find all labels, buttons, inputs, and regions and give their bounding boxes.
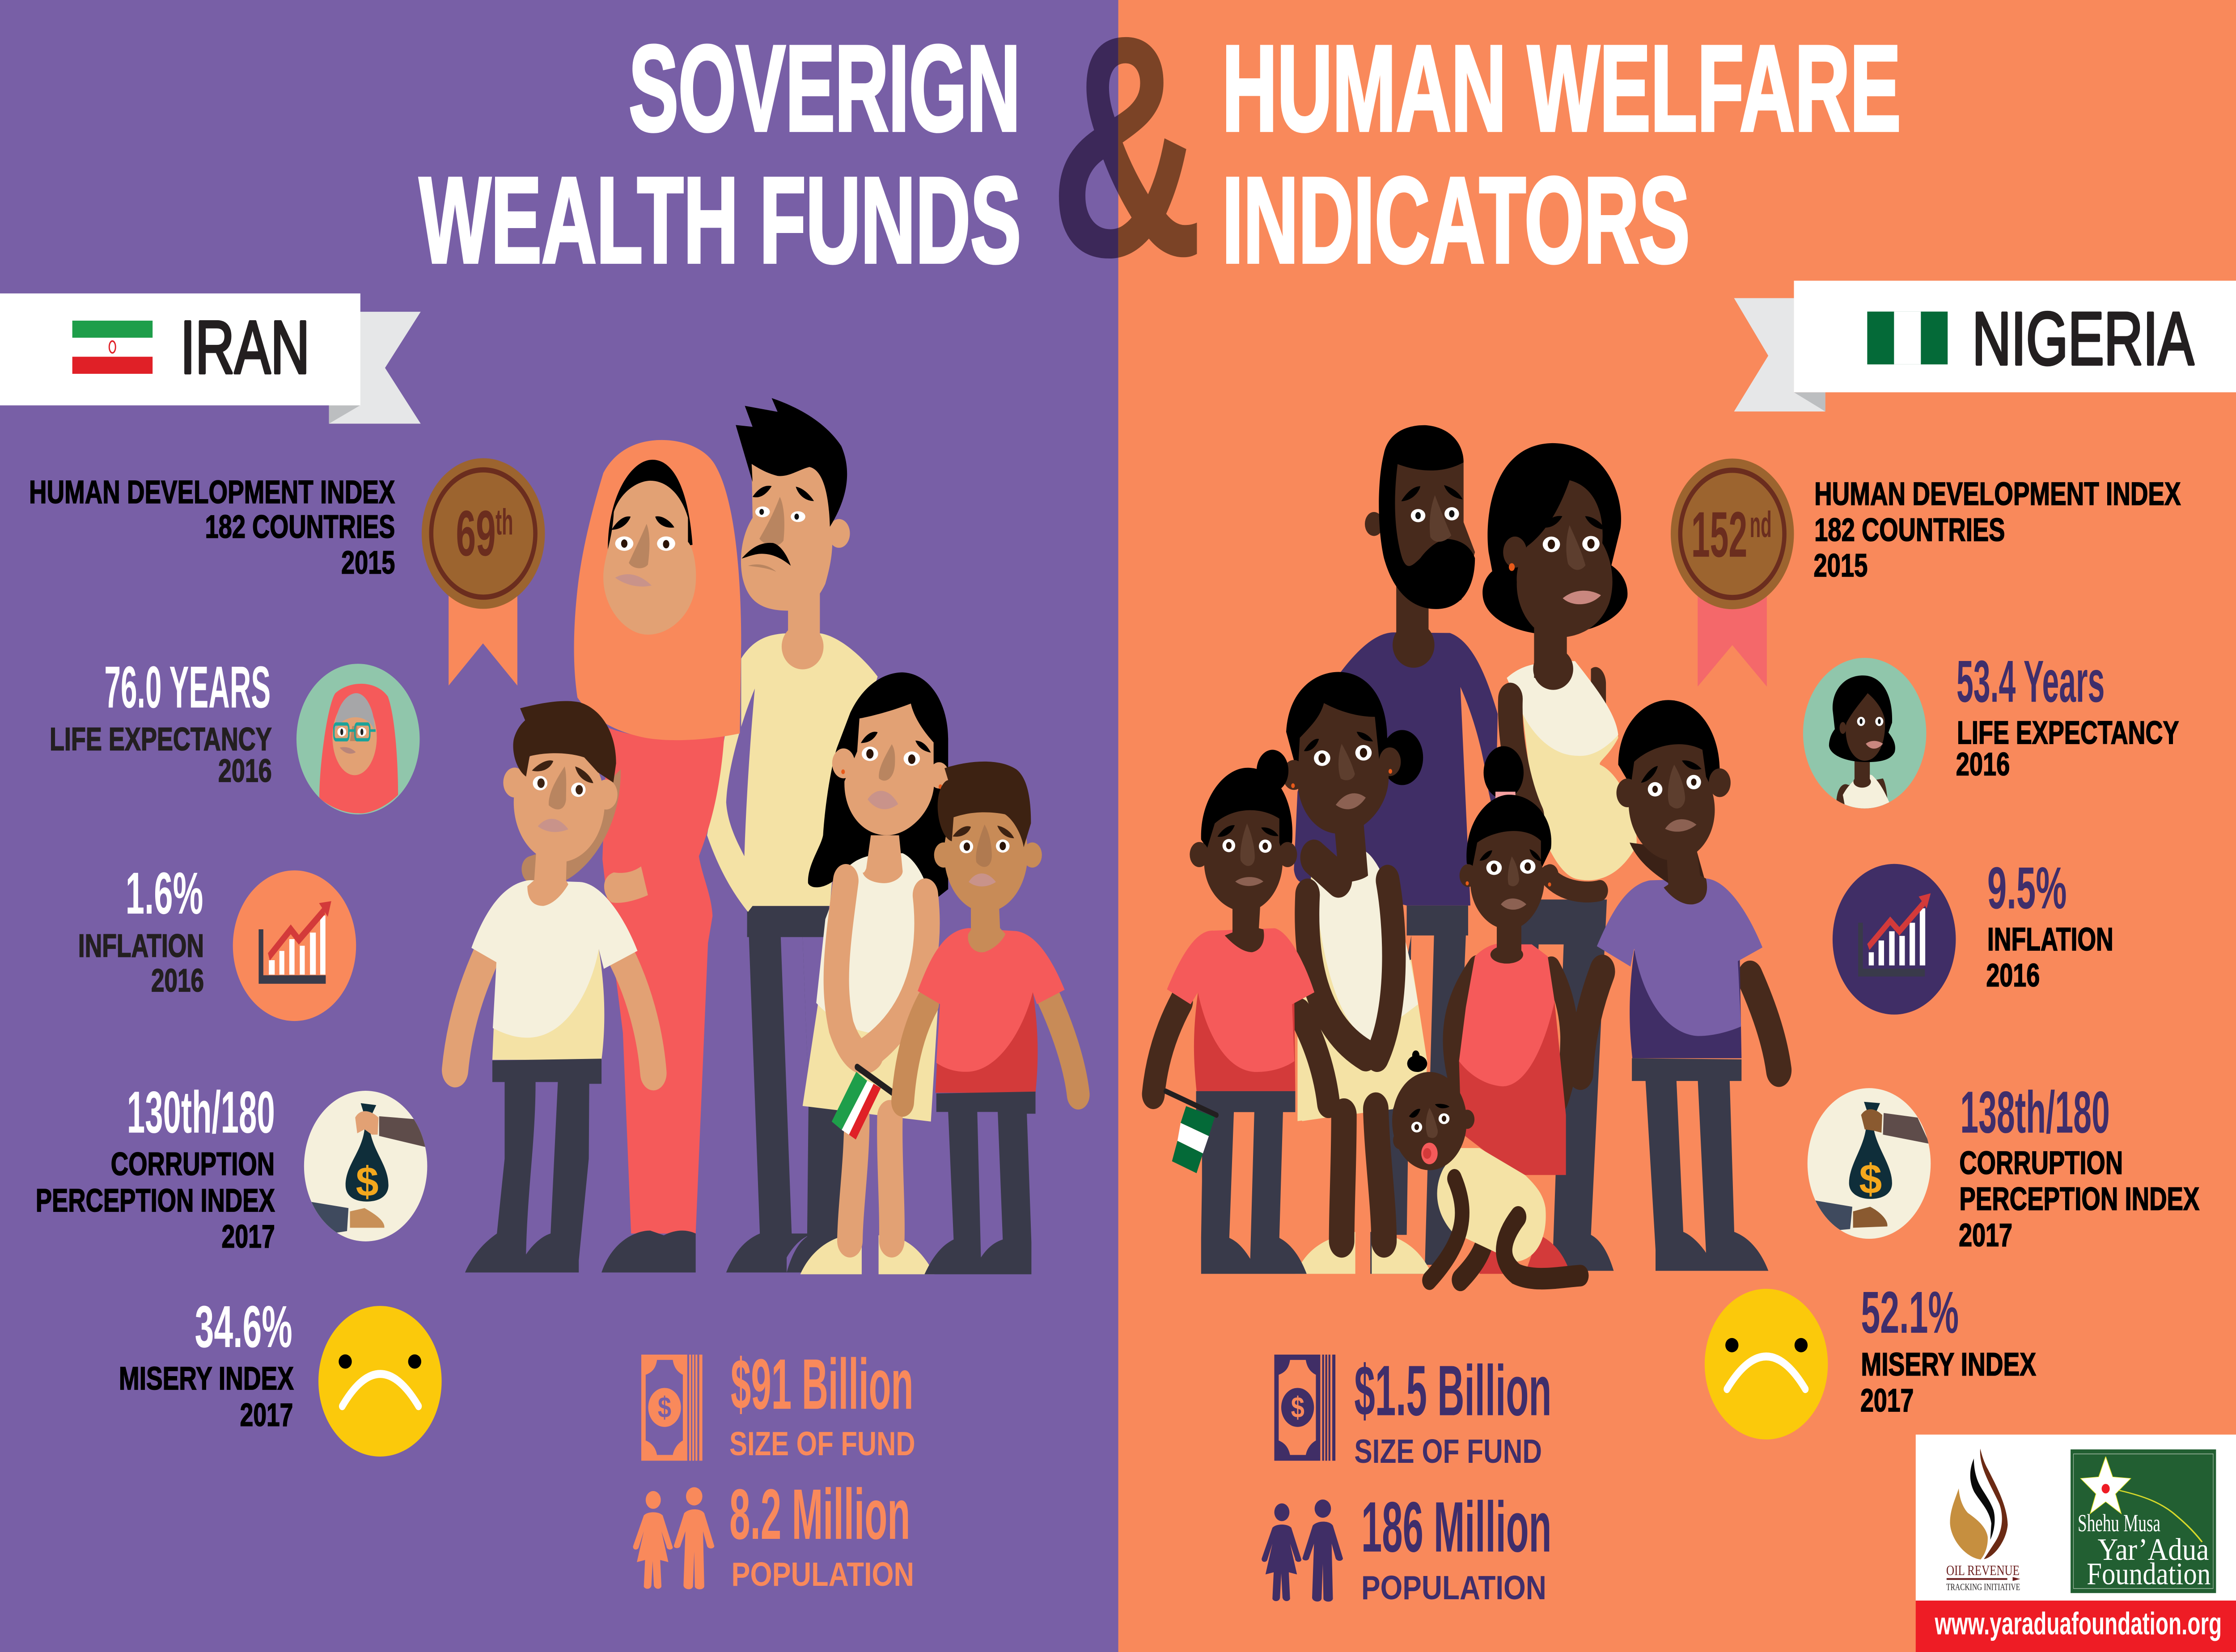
icon: bribe money bag Nigeria bbox=[1808, 1088, 1931, 1239]
text: inflation Iran: 1.6% bbox=[126, 860, 203, 926]
text: HDI Iran: 2015 bbox=[341, 545, 395, 581]
logo: Yar'Adua Foundation: Yar’Adua bbox=[2098, 1532, 2209, 1567]
text: fund size Iran: SIZE OF FUND bbox=[729, 1425, 915, 1463]
medal: 69th bbox=[422, 458, 545, 686]
figure: father bbox=[707, 398, 878, 1272]
icon: Iran flag held by girl bbox=[832, 1067, 902, 1139]
icon: inflation chart Iran bbox=[233, 870, 356, 1021]
icon: bribe money bag Nigeria: $ bbox=[1859, 1156, 1882, 1203]
text: life expectancy Iran: 76.0 YEARS bbox=[104, 654, 271, 720]
figure: crawling baby bbox=[1392, 1051, 1580, 1280]
text: inflation Nigeria bbox=[1986, 855, 2113, 994]
figure: boy in red shirt bbox=[902, 762, 1078, 1274]
text: HDI Iran bbox=[29, 474, 395, 581]
medal: 69th: th bbox=[495, 501, 513, 542]
title: left part bbox=[419, 20, 1021, 288]
text: inflation Nigeria: 9.5% bbox=[1987, 855, 2067, 921]
icon: banknote Nigeria: $ bbox=[1291, 1390, 1304, 1424]
text: population Nigeria: POPULATION bbox=[1361, 1569, 1546, 1606]
panel: Iran fund and population bbox=[633, 1344, 915, 1593]
text: misery index Iran: 2017 bbox=[240, 1397, 293, 1433]
panel: Nigeria background bbox=[1118, 0, 2236, 1652]
panel: logos and website bbox=[1916, 1435, 2236, 1652]
illustration: Nigerian family bbox=[1153, 425, 1779, 1280]
medal: 152nd: 152 bbox=[1691, 499, 1747, 570]
logo: Yar'Adua Foundation: Shehu Musa bbox=[2078, 1510, 2160, 1537]
text: life expectancy Iran: 2016 bbox=[218, 753, 272, 789]
figure: mother bbox=[574, 440, 741, 1272]
text: corruption index Iran bbox=[36, 1079, 275, 1255]
banner: Nigeria: NIGERIA bbox=[1972, 297, 2194, 381]
text: life expectancy Iran: LIFE EXPECTANCY bbox=[50, 721, 272, 758]
text: inflation Iran bbox=[78, 860, 204, 999]
text: corruption index Iran: PERCEPTION INDEX bbox=[36, 1182, 275, 1219]
figure: pregnant mother bbox=[1482, 443, 1637, 1271]
website band bbox=[1916, 1601, 2236, 1652]
figure: boy in purple shirt bbox=[1580, 700, 1779, 1271]
icon: bribe money bag Iran: $ bbox=[356, 1159, 379, 1205]
text: corruption index Nigeria: 138th/180 bbox=[1960, 1079, 2110, 1145]
text: misery index Iran: 34.6% bbox=[195, 1293, 292, 1360]
icon: banknote Iran bbox=[641, 1355, 703, 1461]
icon: banknote Iran: $ bbox=[658, 1390, 671, 1424]
title: right part: HUMAN WELFARE bbox=[1222, 20, 1901, 157]
text: misery index Iran bbox=[119, 1293, 294, 1433]
text: fund size Nigeria: SIZE OF FUND bbox=[1354, 1432, 1542, 1470]
icon: sad face Iran bbox=[318, 1306, 442, 1457]
text: inflation Iran: 2016 bbox=[151, 963, 204, 999]
icon: elderly Nigerian woman bbox=[1803, 658, 1926, 814]
text: corruption index Iran: 2017 bbox=[222, 1219, 275, 1255]
icon: banknote Nigeria bbox=[1274, 1355, 1335, 1461]
panel: Nigeria fund and population bbox=[1262, 1351, 1551, 1606]
text: inflation Nigeria: INFLATION bbox=[1987, 921, 2113, 957]
figure: girl in red shirt with flag bbox=[1153, 750, 1329, 1274]
text: inflation Nigeria: 2016 bbox=[1986, 957, 2040, 994]
banner: Iran bbox=[0, 293, 421, 424]
icon: sad face Nigeria bbox=[1705, 1289, 1828, 1440]
text: misery index Iran: MISERY INDEX bbox=[119, 1361, 294, 1397]
panel: Nigeria stats bbox=[1671, 458, 2199, 1440]
title: right part bbox=[1222, 20, 1901, 288]
medal: 152nd: nd bbox=[1750, 504, 1772, 545]
text: fund size Iran: $91 Billion bbox=[731, 1344, 913, 1424]
text: HDI Nigeria bbox=[1813, 476, 2181, 584]
text: population Nigeria bbox=[1361, 1487, 1551, 1606]
text: inflation Iran: INFLATION bbox=[78, 928, 204, 964]
text: population Iran bbox=[729, 1474, 914, 1593]
banner: Iran: IRAN bbox=[180, 305, 310, 389]
icon: elderly Iranian woman bbox=[296, 664, 419, 814]
figure: small girl in red dress bbox=[1453, 746, 1570, 1175]
figure: father bbox=[1294, 425, 1498, 1274]
icon: inflation chart Nigeria bbox=[1833, 864, 1956, 1015]
text: corruption index Nigeria: CORRUPTION bbox=[1959, 1145, 2123, 1181]
figure: boy in white shirt bbox=[455, 701, 653, 1272]
text: life expectancy Nigeria bbox=[1956, 648, 2179, 783]
title: left part: SOVERIGN bbox=[629, 20, 1021, 157]
text: HDI Nigeria: HUMAN DEVELOPMENT INDEX bbox=[1814, 476, 2181, 512]
medal: 69th: 69 bbox=[456, 497, 496, 569]
text: misery index Nigeria: 52.1% bbox=[1861, 1279, 1959, 1346]
logo: Oil Revenue Tracking Initiative: TRACKING INITIATIVE bbox=[1946, 1582, 2020, 1593]
logo: Yar'Adua Foundation: Foundation bbox=[2087, 1556, 2211, 1591]
illustration: Iranian family bbox=[455, 398, 1078, 1274]
figure: large girl in cream dress bbox=[1283, 672, 1432, 1274]
panel: Iran background bbox=[0, 0, 1118, 1652]
text: corruption index Iran: CORRUPTION bbox=[111, 1146, 275, 1182]
title: ampersand bbox=[1059, 37, 1197, 258]
figure: girl holding flag bbox=[800, 672, 949, 1274]
medal: 152nd bbox=[1671, 458, 1794, 686]
logo: Oil Revenue Tracking Initiative bbox=[1946, 1449, 2020, 1593]
text: fund size Nigeria: $1.5 Billion bbox=[1354, 1351, 1551, 1430]
text: life expectancy Nigeria: 2016 bbox=[1956, 746, 2010, 783]
text: HDI Nigeria: 182 COUNTRIES bbox=[1814, 512, 2005, 548]
icon: Nigeria flag held by girl bbox=[1165, 1091, 1216, 1173]
text: life expectancy Nigeria: LIFE EXPECTANCY bbox=[1957, 715, 2179, 751]
text: corruption index Nigeria: PERCEPTION INDEX bbox=[1959, 1181, 2199, 1217]
logo: Oil Revenue Tracking Initiative: OIL REVENUE bbox=[1946, 1563, 2020, 1579]
title: right part: INDICATORS bbox=[1222, 152, 1690, 288]
text: misery index Nigeria bbox=[1860, 1279, 2036, 1419]
text: corruption index Nigeria: 2017 bbox=[1959, 1217, 2012, 1254]
title: left part: WEALTH FUNDS bbox=[419, 152, 1021, 288]
text: fund size Iran bbox=[729, 1344, 915, 1463]
text: life expectancy Nigeria: 53.4 Years bbox=[1956, 648, 2105, 715]
banner: Nigeria bbox=[1734, 281, 2236, 411]
text: population Nigeria: 186 Million bbox=[1361, 1487, 1551, 1567]
text: life expectancy Iran bbox=[50, 654, 272, 789]
text: fund size Nigeria bbox=[1354, 1351, 1551, 1470]
text: population Iran: POPULATION bbox=[732, 1555, 914, 1593]
text: corruption index Nigeria bbox=[1959, 1079, 2199, 1254]
logo: Yar'Adua Foundation bbox=[2071, 1449, 2216, 1593]
icon: people Nigeria bbox=[1262, 1500, 1343, 1601]
icon: bribe money bag Iran bbox=[304, 1091, 429, 1241]
panel: Iran stats bbox=[29, 458, 545, 1457]
text: population Iran: 8.2 Million bbox=[729, 1474, 910, 1554]
text: misery index Nigeria: MISERY INDEX bbox=[1861, 1347, 2036, 1383]
icon: people Iran bbox=[633, 1487, 714, 1589]
text: HDI Iran: 182 COUNTRIES bbox=[205, 509, 395, 545]
text: HDI Nigeria: 2015 bbox=[1813, 547, 1868, 584]
text: misery index Nigeria: 2017 bbox=[1860, 1382, 1914, 1419]
text: corruption index Iran: 130th/180 bbox=[127, 1079, 275, 1145]
text: HDI Iran: HUMAN DEVELOPMENT INDEX bbox=[29, 474, 395, 510]
